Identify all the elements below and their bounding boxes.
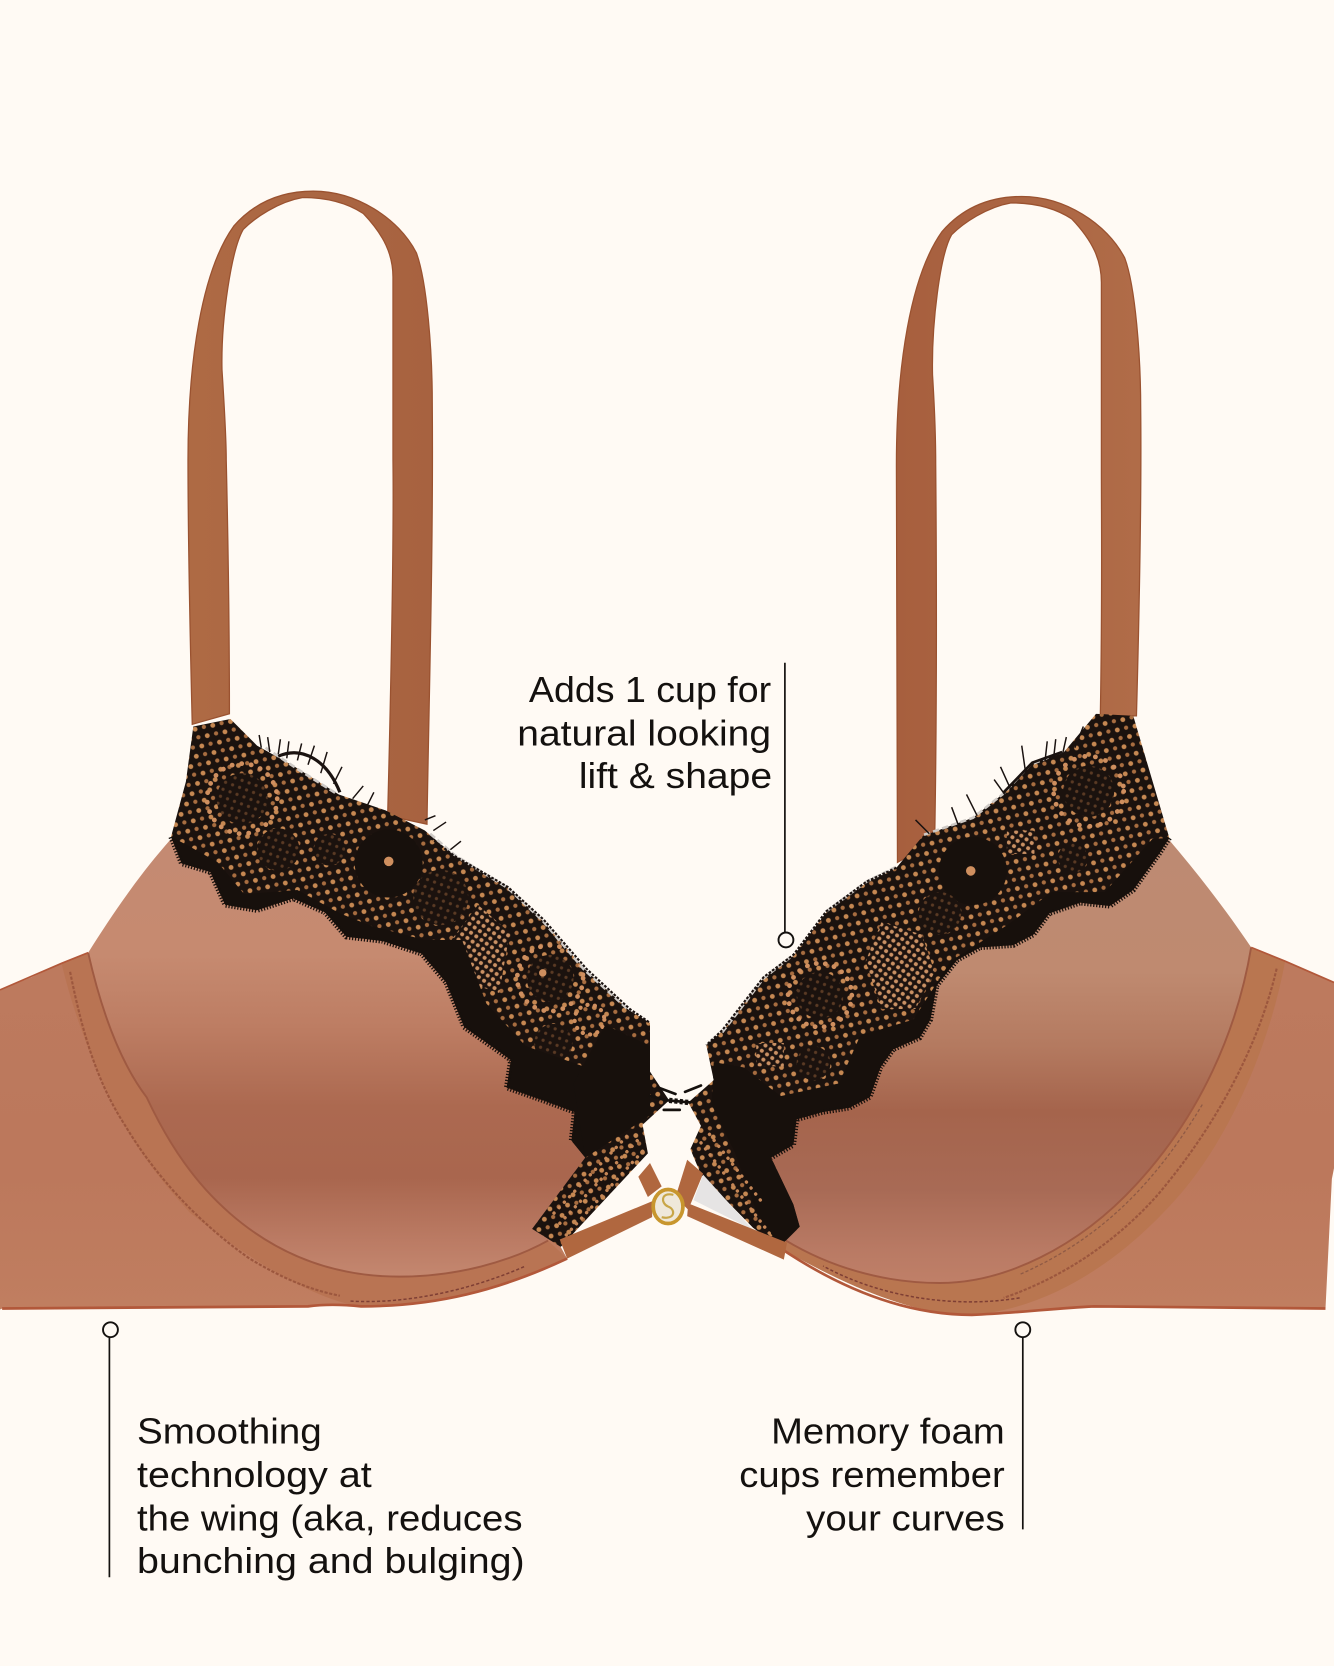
left lace inner dark core (586, 1026, 650, 1158)
gold center ring charm (653, 1190, 683, 1224)
callout: smoothing technology (103, 1322, 525, 1581)
center lace tangle (650, 1085, 701, 1110)
left lace rosettes (207, 764, 604, 1062)
right cup rim line (786, 947, 1251, 1283)
callout text (517, 669, 772, 796)
callout text: cups remember (739, 1454, 1005, 1495)
right bottom hem (782, 1249, 1325, 1315)
callout text: the wing (aka, reduces (137, 1497, 523, 1538)
left bottom hem (2, 1259, 567, 1308)
left band top edge (0, 953, 88, 990)
left lace fuzzy lower edge (171, 837, 575, 1141)
left underwire band (62, 953, 567, 1306)
right wing (782, 839, 1334, 1315)
callout leader line and dot (779, 663, 793, 947)
callout text: Adds 1 cup for (529, 669, 771, 710)
left lace solid scallop edge (171, 837, 650, 1158)
right lace rosettes (788, 756, 1124, 1080)
right strap (896, 196, 1141, 862)
callout leader line and dot (103, 1322, 118, 1577)
left cup (88, 839, 627, 1277)
left hem stitching (350, 1266, 526, 1302)
left stitching (70, 972, 340, 1296)
callout text (739, 1410, 1005, 1538)
right lace trim (688, 714, 1170, 1242)
callout text (137, 1410, 525, 1581)
right hem stitching (823, 1266, 1020, 1302)
right underwire band (782, 947, 1285, 1315)
callout text: technology at (137, 1454, 372, 1495)
callout text: Smoothing (137, 1410, 322, 1451)
left center strap (560, 1163, 662, 1259)
left cup rim line (88, 953, 548, 1277)
callout text: your curves (806, 1497, 1005, 1538)
right center strap (675, 1160, 787, 1260)
callout text: natural looking (517, 713, 771, 754)
right stitching (1004, 969, 1277, 1298)
callout leader line and dot (1015, 1322, 1030, 1529)
left wing (0, 844, 567, 1310)
right lace fuzzy lower edge (771, 838, 1169, 1158)
bra illustration (0, 191, 1334, 1315)
right lace solid scallop edge (712, 838, 1169, 1247)
callout text: lift & shape (579, 755, 772, 796)
left lace strip dots (550, 1136, 643, 1236)
left lace mesh panel (451, 905, 510, 993)
left lace sheer top edge (266, 748, 629, 1010)
right lace mesh panels (866, 922, 935, 1009)
left lace trim (159, 701, 669, 1264)
right lace eyelash fringe (706, 722, 1094, 1045)
right band top edge (1251, 947, 1334, 982)
left lace eyelash fringe (259, 735, 650, 1023)
callout text: bunching and bulging) (137, 1540, 525, 1581)
left strap (188, 191, 432, 824)
right lace strip dots (701, 1134, 773, 1238)
callout: adds 1 cup (517, 663, 793, 947)
callout: memory foam (739, 1322, 1030, 1538)
callout text: Memory foam (771, 1410, 1005, 1451)
right cup seam (1020, 1105, 1202, 1275)
white lining sliver (694, 1175, 753, 1230)
right lace sheer top edge (722, 756, 1051, 1032)
right cup (743, 839, 1251, 1283)
